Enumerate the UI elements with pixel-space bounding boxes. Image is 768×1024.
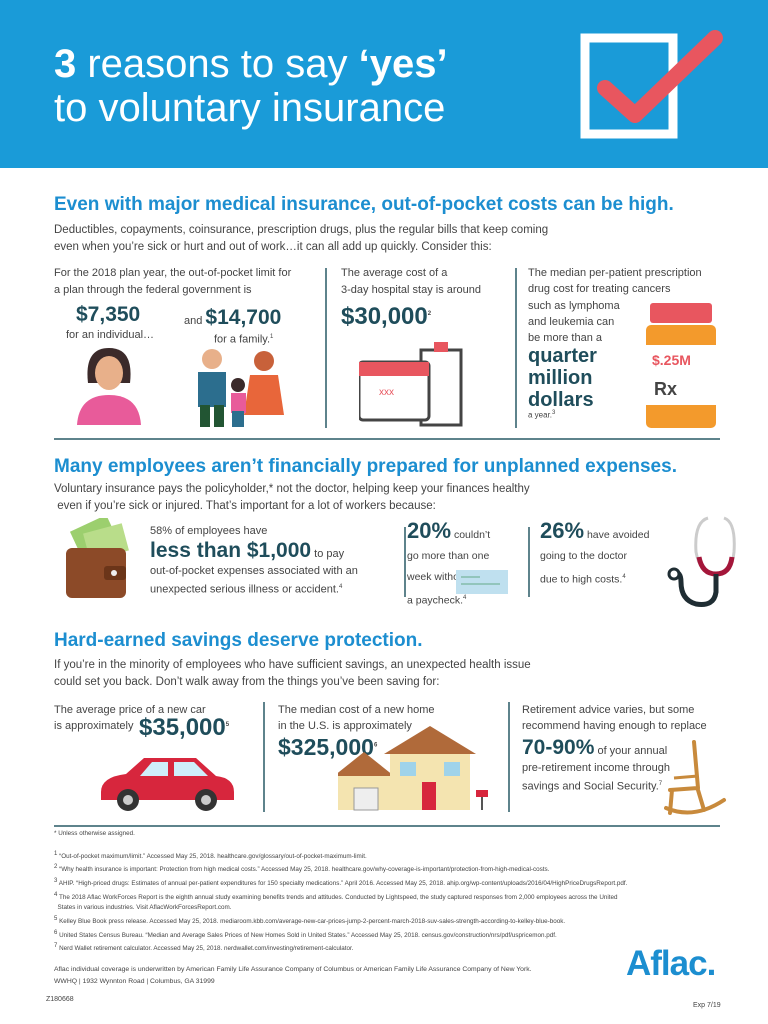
stat: cancer drug cost: million xyxy=(528,367,592,389)
underwriting notice: WWHQ | 1932 Wynnton Road | Columbus, GA 31999 xyxy=(54,978,215,985)
stat: hospital stay xyxy=(341,267,481,426)
stat: retirement: savings and Social Security.7 xyxy=(522,781,662,793)
section 3 heading: Hard-earned savings deserve protection. xyxy=(54,630,423,651)
stat: out-of-pocket limit: $7,350 xyxy=(76,303,140,326)
section 1 intro xyxy=(54,224,548,253)
stat: retirement: Retirement advice varies, but some xyxy=(522,704,694,716)
footnotes xyxy=(54,830,627,952)
stat: 58% less than $1,000: less than $1,000 to pay xyxy=(150,539,344,562)
icon: paycheck xyxy=(456,570,508,594)
stat: 26%: going to the doctor xyxy=(540,550,627,562)
stat: car price: The average price of a new car xyxy=(54,704,206,716)
stat: 58% less than $1,000: 58% of employees have xyxy=(150,525,267,537)
stat: cancer drug cost: be more than a xyxy=(528,332,602,344)
title: to voluntary insurance xyxy=(54,86,445,130)
stat: retirement xyxy=(522,704,726,815)
stat: 20% xyxy=(407,518,490,606)
icon: pill bottle: Rx xyxy=(654,379,677,399)
stat: 58% less than $1,000: out-of-pocket expenses associated with an xyxy=(150,565,358,577)
underwriting notice xyxy=(54,966,532,985)
stat: cancer drug cost: such as lymphoma xyxy=(528,300,620,312)
icon: calendar & hospital: xxx xyxy=(379,387,394,398)
footnotes: 2 “Why health insurance is important: Protection from high medical costs.” Accessed May 25, 2018. healthcare.gov/why-coverage-is-important/protection-from-high-medical-costs. xyxy=(54,864,549,873)
stat: 58% less than $1,000: unexpected serious illness or accident.4 xyxy=(150,584,342,596)
stat: car price: is approximately xyxy=(54,720,133,732)
icon: calendar & hospital xyxy=(359,342,462,426)
stat: retirement: pre-retirement income through xyxy=(522,762,670,774)
icon: red car xyxy=(101,758,234,811)
title xyxy=(54,42,448,130)
section 1 heading: Even with major medical insurance, out-of-pocket costs can be high. xyxy=(54,194,674,215)
icon: woman xyxy=(77,348,141,425)
stat: home price: $325,0006 xyxy=(278,734,377,760)
stat: out-of-pocket limit: a plan through the federal government is xyxy=(54,284,252,296)
underwriting notice: Aflac individual coverage is underwritten by American Family Life Assurance Company of Columbus or American Family Life Assurance Company of New York. xyxy=(54,966,532,973)
stat: cancer drug cost: quarter xyxy=(528,345,597,367)
stat: car price xyxy=(54,704,234,811)
stat: cancer drug cost: a year.3 xyxy=(528,410,555,420)
icon: wallet xyxy=(66,518,129,598)
icon: family xyxy=(198,349,284,427)
stat: retirement: recommend having enough to replace xyxy=(522,720,707,732)
icon: pill bottle: $.25M xyxy=(652,352,691,368)
stat: out-of-pocket limit: for an individual… xyxy=(66,329,154,341)
stat: 26% xyxy=(540,518,649,586)
footnotes: States in various industries. Visit AflacWorkForcesReport.com. xyxy=(57,904,232,911)
icon: rocking chair xyxy=(664,740,726,815)
footnotes: * Unless otherwise assigned. xyxy=(54,830,135,837)
section 3 intro: If you’re in the minority of employees who have sufficient savings, an unexpected health issue xyxy=(54,659,531,671)
stat: 26%: due to high costs.4 xyxy=(540,574,626,586)
stat: out-of-pocket limit: for a family.1 xyxy=(214,334,273,346)
section 2 intro: even if you’re sick or injured. That’s important for a lot of workers because: xyxy=(57,500,436,512)
stat: 26%: 26% have avoided xyxy=(540,518,649,543)
stat: cancer drug cost: dollars xyxy=(528,389,594,411)
footnotes: 3 AHIP. “High-priced drugs: Estimates of annual per-patient expenditures for 150 specialty medications.” April 2016. Accessed May 25, 2018. ahip.org/wp-content/uploads/2016/04/HighPriceDrugsReport.pdf. xyxy=(54,878,627,887)
footnotes: 1 “Out-of-pocket maximum/limit.” Accessed May 25, 2018. healthcare.gov/glossary/out-of-pocket-maximum-limit. xyxy=(54,851,367,860)
icon: house xyxy=(338,726,488,810)
stat: out-of-pocket limit: For the 2018 plan year, the out-of-pocket limit for xyxy=(54,267,291,279)
stat: cancer drug cost xyxy=(528,267,716,428)
section 1 intro: even when you’re sick or hurt and out of work…it can all add up quickly. Consider this: xyxy=(54,241,492,253)
section 3 intro: could set you back. Don’t walk away from the things you’ve been saving for: xyxy=(54,676,439,688)
stat: retirement: 70-90% of your annual xyxy=(522,736,667,759)
stat: home price xyxy=(278,704,488,810)
logo: Aflac: Aflac. xyxy=(626,944,715,983)
stat: hospital stay: 3-day hospital stay is around xyxy=(341,284,481,296)
footnotes: 4 The 2018 Aflac WorkForces Report is the eighth annual study examining benefits trends and attitudes. Conducted by Lightspeed, the study captured responses from 2,000 employees across the United xyxy=(54,892,618,901)
icon: checkbox xyxy=(580,30,723,138)
stat: 20%: week without xyxy=(407,571,468,583)
section 3 intro xyxy=(54,659,531,688)
expiry: Exp 7/19 xyxy=(693,1002,721,1009)
footnotes: 5 Kelley Blue Book press release. Accessed May 25, 2018. mediaroom.kbb.com/average-new-car-prices-jump-2-percent-march-2018-suv-sales-strength-according-to-kelley-blue-book. xyxy=(54,916,565,925)
stat: home price: The median cost of a new home xyxy=(278,704,435,716)
title: 3 reasons to say ‘yes’ xyxy=(54,42,448,86)
stat: cancer drug cost: and leukemia can xyxy=(528,316,614,328)
section 2 heading: Many employees aren’t financially prepared for unplanned expenses. xyxy=(54,456,677,477)
stat: 20%: a paycheck.4 xyxy=(407,594,466,606)
stat: hospital stay: $30,0002 xyxy=(341,303,431,330)
stat: cancer drug cost: The median per-patient prescription xyxy=(528,267,702,279)
stat: hospital stay: The average cost of a xyxy=(341,267,447,279)
section 2 intro xyxy=(54,483,530,512)
section 1 intro: Deductibles, copayments, coinsurance, prescription drugs, plus the regular bills that keep coming xyxy=(54,224,548,236)
stat: 58% less than $1,000 xyxy=(150,525,358,596)
footnotes: 7 Nerd Wallet retirement calculator. Accessed May 25, 2018. nerdwallet.com/investing/retirement-calculator. xyxy=(54,943,354,952)
stat: home price: in the U.S. is approximately xyxy=(278,720,412,732)
stat: out-of-pocket limit xyxy=(54,267,292,427)
stat: out-of-pocket limit: and $14,700 xyxy=(184,306,281,329)
icon: stethoscope xyxy=(668,516,736,607)
stat: cancer drug cost: drug cost for treating cancers xyxy=(528,283,670,295)
section 2 intro: Voluntary insurance pays the policyholder,* not the doctor, helping keep your finances healthy xyxy=(54,483,530,495)
footnotes: 6 United States Census Bureau. “Median and Average Sales Prices of New Homes Sold in United States.” Accessed May 25, 2018. census.gov/construction/nrs/pdf/uspricemon.pdf. xyxy=(54,930,557,939)
icon: pill bottle xyxy=(646,303,716,428)
stat: 20%: 20% couldn’t xyxy=(407,518,490,543)
header banner xyxy=(0,0,768,168)
code: Z180668 xyxy=(46,996,74,1003)
stat: 20%: go more than one xyxy=(407,550,489,562)
stat: car price: $35,0005 xyxy=(139,714,229,741)
